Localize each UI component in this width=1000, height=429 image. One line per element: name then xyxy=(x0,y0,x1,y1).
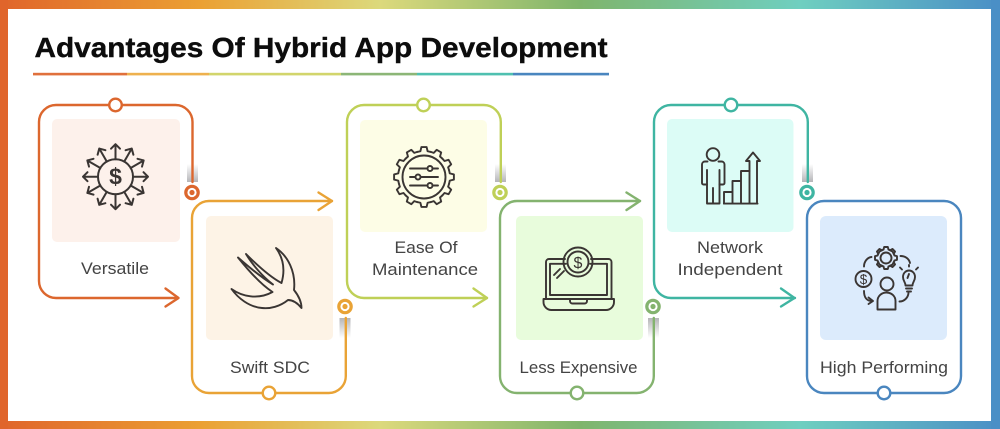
panel: Versatile xyxy=(39,99,200,306)
panel: Ease Of Maintenance xyxy=(347,99,508,306)
label: Ease Of Maintenance xyxy=(372,239,478,279)
panel: Network Independent xyxy=(654,99,815,306)
panel: High Performing xyxy=(807,201,961,399)
label: Network Independent: Independent xyxy=(678,261,783,279)
icon: swift bird xyxy=(232,248,302,308)
label: Versatile: Versatile xyxy=(81,260,149,278)
icon: dollar with radiating arrows xyxy=(83,144,148,209)
icon: person with gear, coin and bulb xyxy=(856,247,918,310)
icon: laptop with coin: $ xyxy=(574,255,583,272)
label: Swift SDC: Swift SDC xyxy=(230,359,310,377)
panel: Less Expensive xyxy=(500,192,661,399)
panel: Swift SDC xyxy=(192,192,353,399)
label: Network Independent: Network xyxy=(697,239,764,257)
label: Less Expensive: Less Expensive xyxy=(520,359,638,377)
title underline xyxy=(33,73,609,75)
label: Ease Of Maintenance: Maintenance xyxy=(372,261,478,279)
title: Advantages Of Hybrid App Development xyxy=(34,32,608,63)
icon: laptop with coin xyxy=(544,248,614,310)
icon: gear with sliders xyxy=(394,147,454,207)
icon: person with gear, coin and bulb: $ xyxy=(860,272,868,287)
icon: dollar with radiating arrows: $ xyxy=(109,164,122,190)
label: High Performing: High Performing xyxy=(820,359,948,377)
label: Network Independent xyxy=(678,239,783,279)
icon: person with growth chart xyxy=(702,148,760,204)
label: Ease Of Maintenance: Ease Of xyxy=(394,239,458,257)
